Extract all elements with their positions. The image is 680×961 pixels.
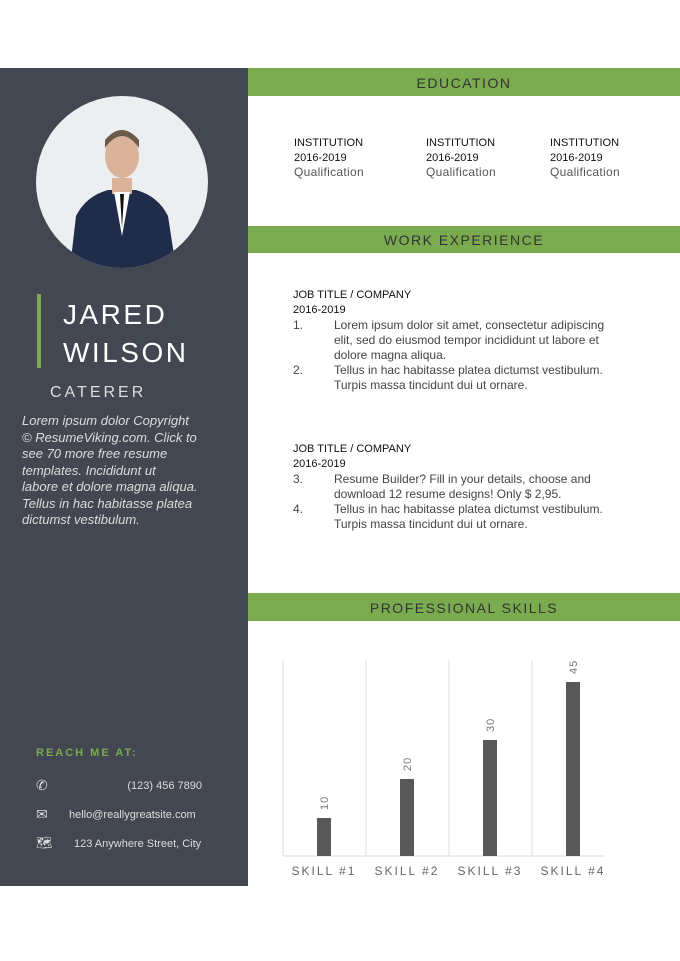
bar chart: 20: [402, 757, 414, 771]
name with accent line: [37, 294, 188, 368]
bar chart: SKILL #3: [458, 864, 522, 878]
contact: phone: ✆: [36, 777, 48, 793]
education entries: 2016-2019: [426, 152, 479, 164]
name with accent line: WILSON: [63, 337, 188, 368]
contact: phone: (123) 456 7890: [127, 780, 202, 792]
work experience heading: [248, 226, 680, 253]
summary text: see 70 more free resume: [22, 446, 167, 461]
summary text: Lorem ipsum dolor Copyright: [22, 413, 189, 428]
job 1: Turpis massa tincidunt dui ut ornare.: [334, 378, 528, 392]
education entries: INSTITUTION: [426, 137, 495, 149]
education entries: INSTITUTION: [550, 137, 619, 149]
bar chart: 30: [485, 718, 497, 732]
job 2: 3.: [293, 472, 303, 486]
summary text: templates. Incididunt ut: [22, 462, 156, 478]
professional skills heading: PROFESSIONAL SKILLS: [370, 600, 558, 616]
job 1: elit, sed do eiusmod tempor incididunt ut labore et: [334, 333, 599, 347]
job 2: [293, 443, 603, 531]
contact heading: REACH ME AT:: [36, 747, 138, 759]
professional skills heading: [248, 593, 680, 621]
summary text: labore et dolore magna aliqua.: [22, 479, 198, 494]
bar chart: SKILL #1: [292, 864, 356, 878]
name with accent line: JARED: [63, 299, 167, 330]
job 2: 2016-2019: [293, 458, 346, 470]
job 1: Tellus in hac habitasse platea dictumst vestibulum.: [334, 363, 603, 377]
job 1: [293, 289, 604, 392]
bar chart: SKILL #4: [541, 864, 605, 878]
contact: email: ✉: [36, 806, 48, 822]
education entries: INSTITUTION: [294, 137, 363, 149]
education entries: Qualification: [294, 165, 364, 179]
contact: address: 123 Anywhere Street, City: [74, 838, 201, 850]
contact: address: 🗺: [36, 835, 53, 850]
work experience heading: WORK EXPERIENCE: [384, 232, 544, 248]
contact: email: [36, 806, 196, 822]
education entries: [294, 137, 620, 179]
bar chart: SKILL #2: [375, 864, 439, 878]
job 1: 2016-2019: [293, 304, 346, 316]
bar chart: 45: [568, 660, 580, 674]
sidebar panel: [0, 68, 248, 886]
education entries: 2016-2019: [550, 152, 603, 164]
education entries: Qualification: [426, 165, 496, 179]
bar chart: [282, 660, 605, 878]
contact: email: hello@reallygreatsite.com: [69, 809, 196, 821]
summary text: Tellus in hac habitasse platea: [22, 496, 192, 510]
education entries: 2016-2019: [294, 152, 347, 164]
job 1: Lorem ipsum dolor sit amet, consectetur adipiscing: [334, 318, 604, 332]
photo: [36, 96, 208, 268]
summary text: [22, 413, 198, 527]
job 2: Tellus in hac habitasse platea dictumst vestibulum.: [334, 502, 603, 516]
bar chart: 10: [319, 796, 331, 810]
job 2: JOB TITLE / COMPANY: [293, 443, 411, 455]
job 1: JOB TITLE / COMPANY: [293, 289, 411, 301]
job 2: download 12 resume designs! Only $ 2,95.: [334, 487, 561, 501]
education heading: EDUCATION: [417, 75, 511, 91]
job 1: 1.: [293, 318, 303, 332]
contact: address: [36, 835, 202, 850]
summary text: © ResumeViking.com. Click to: [22, 430, 197, 444]
summary text: dictumst vestibulum.: [22, 512, 140, 527]
job 2: Resume Builder? Fill in your details, choose and: [334, 472, 591, 486]
job 2: Turpis massa tincidunt dui ut ornare.: [334, 517, 528, 531]
job 1: dolore magna aliqua.: [334, 348, 446, 362]
education entries: Qualification: [550, 165, 620, 179]
contact: phone: [36, 777, 202, 793]
job 2: 4.: [293, 502, 303, 516]
job title: CATERER: [50, 384, 146, 401]
job 1: 2.: [293, 363, 303, 377]
education heading: [248, 68, 680, 96]
